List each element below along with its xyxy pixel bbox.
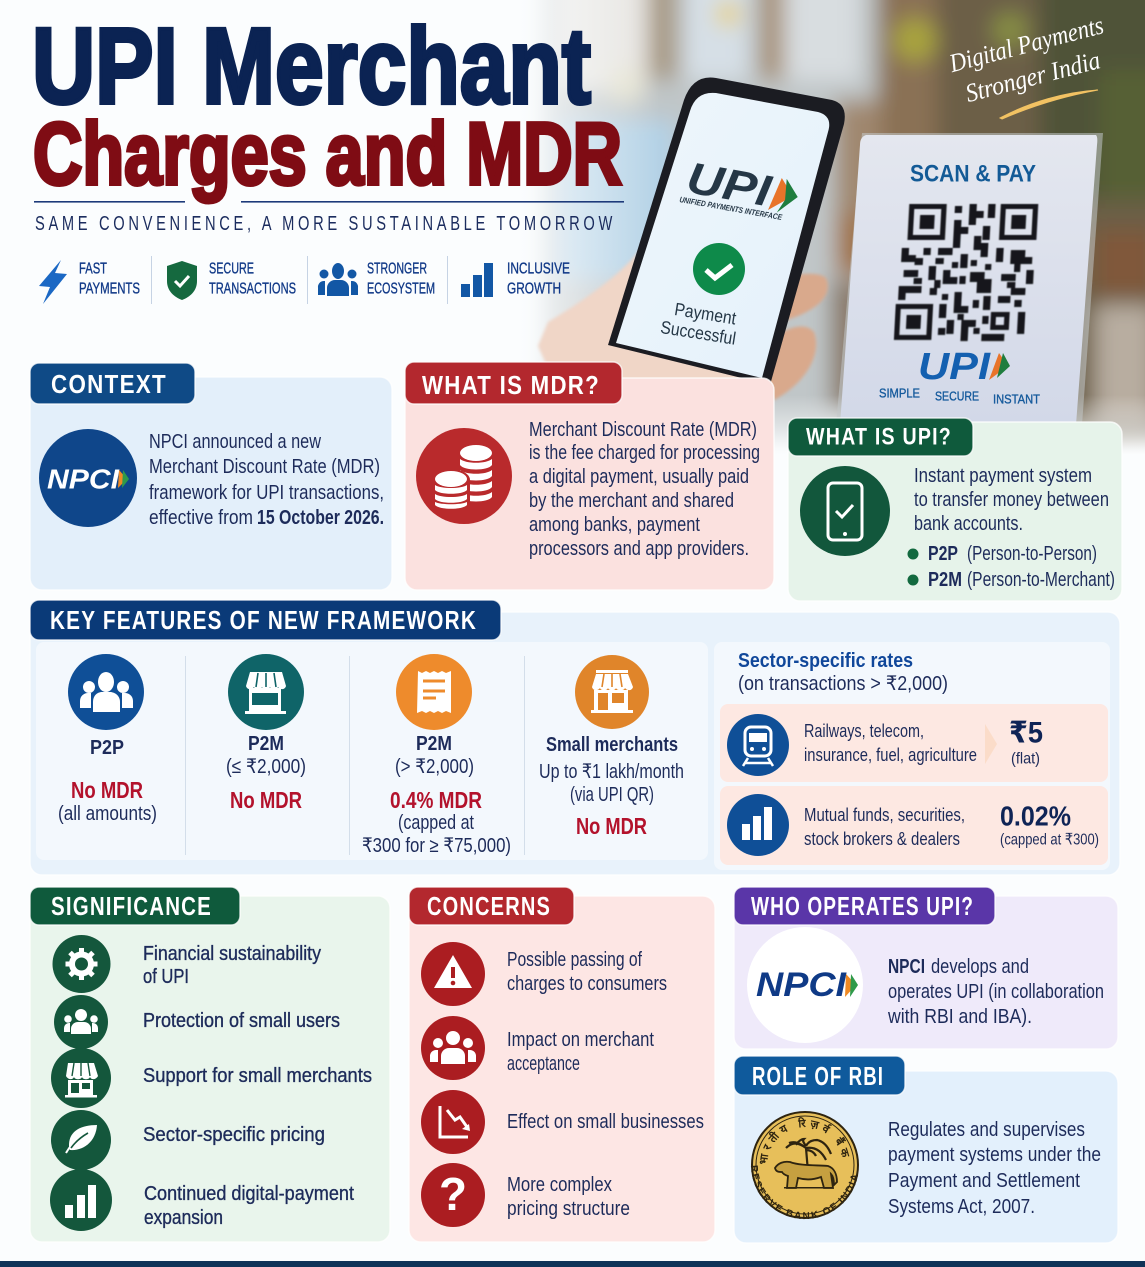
MDR text: is the fee charged for processing bbox=[529, 442, 760, 464]
item: support for small merchants bbox=[51, 1048, 372, 1108]
UPI text bbox=[914, 465, 1109, 535]
item: passing charges: charges to consumers bbox=[507, 973, 667, 995]
feature text: No MDR bbox=[230, 787, 302, 813]
context text bbox=[149, 431, 384, 529]
benefit: inclusive growth: INCLUSIVE bbox=[507, 260, 570, 278]
UPI text: bank accounts. bbox=[914, 513, 1023, 535]
bullet: P2P bbox=[908, 543, 1097, 565]
item: passing charges: Possible passing of bbox=[507, 949, 642, 971]
rate: 5 rupees: ₹5 bbox=[1009, 716, 1043, 750]
icon: bars bbox=[727, 794, 789, 856]
benefit: inclusive growth bbox=[507, 260, 570, 298]
item: pricing structure: pricing structure bbox=[507, 1198, 630, 1220]
UPI logo on card: UPI bbox=[918, 346, 992, 388]
handwritten slogan: Stronger India bbox=[962, 45, 1103, 108]
item: digital-payment expansion: expansion bbox=[144, 1207, 223, 1229]
sector-specific rates bbox=[714, 642, 1110, 870]
benefit: inclusive growth: GROWTH bbox=[507, 280, 561, 298]
card captions: SIMPLE bbox=[879, 386, 920, 400]
who operates text: with RBI and IBA). bbox=[887, 1006, 1032, 1028]
benefit: stronger ecosystem: STRONGER bbox=[367, 260, 427, 278]
rate: 5 rupees bbox=[1009, 716, 1043, 768]
hand holding phone bbox=[538, 250, 828, 400]
panel: what is UPI bbox=[788, 418, 1122, 601]
item: pricing structure bbox=[421, 1163, 630, 1227]
item: support for small merchants: Support for small merchants bbox=[143, 1065, 372, 1087]
icon: shield bbox=[167, 261, 197, 300]
item: merchant acceptance: acceptance bbox=[507, 1053, 580, 1075]
icon: NPCI logo: NPCI bbox=[47, 464, 120, 494]
hero photo background bbox=[0, 0, 1145, 495]
feature: P2M above 2000 bbox=[362, 654, 511, 857]
card captions: INSTANT bbox=[993, 392, 1040, 406]
feature text: (capped at bbox=[398, 812, 474, 834]
tagline: SAME CONVENIENCE, A MORE SUSTAINABLE TOMORROW bbox=[35, 213, 616, 235]
RBI text: Payment and Settlement bbox=[888, 1170, 1080, 1192]
payment successful text: Payment bbox=[673, 299, 738, 328]
sector heading: Sector-specific rates bbox=[738, 650, 913, 672]
item: financial sustainability: of UPI bbox=[143, 966, 189, 988]
icon: RBI seal: भारतीय रिज़र्व बैंक bbox=[760, 1117, 850, 1164]
benefit: secure transactions bbox=[209, 260, 296, 298]
icon: people bbox=[68, 654, 144, 730]
heading: significance: SIGNIFICANCE bbox=[51, 891, 212, 921]
feature text: P2P bbox=[90, 737, 124, 759]
payment successful text bbox=[659, 297, 741, 349]
row text bbox=[804, 721, 977, 765]
icon: people bbox=[318, 263, 358, 296]
benefit: fast payments bbox=[79, 260, 140, 298]
icon: NPCI logo bbox=[39, 429, 137, 527]
who operates text: operates UPI (in collaboration bbox=[888, 981, 1104, 1003]
row text: stock brokers & dealers bbox=[804, 829, 960, 849]
item: protection of small users bbox=[54, 995, 340, 1049]
item: sector-specific pricing bbox=[51, 1110, 325, 1170]
rate: 0.02 percent bbox=[1000, 800, 1099, 848]
icon: store bbox=[575, 655, 649, 729]
sector heading bbox=[738, 650, 948, 695]
item: sector-specific pricing: Sector-specific pricing bbox=[143, 1124, 325, 1146]
item: small businesses bbox=[421, 1090, 704, 1154]
sector row: percentage rate bbox=[720, 786, 1108, 865]
row text bbox=[804, 805, 965, 849]
panel: concerns bbox=[409, 887, 715, 1242]
icon: train bbox=[727, 714, 789, 776]
sector heading: (on transactions > ₹2,000) bbox=[738, 673, 948, 695]
heading: what is MDR bbox=[405, 362, 622, 404]
item: pricing structure: ? bbox=[439, 1168, 467, 1220]
feature: P2P bbox=[58, 654, 157, 825]
RBI text: payment systems under the bbox=[888, 1144, 1101, 1166]
heading: concerns bbox=[409, 887, 574, 925]
row text: Railways, telecom, bbox=[804, 721, 924, 741]
UPI logo on phone: UNIFIED PAYMENTS INTERFACE bbox=[679, 195, 783, 222]
item: merchant acceptance bbox=[421, 1016, 654, 1080]
context text: framework for UPI transactions, bbox=[149, 482, 384, 504]
item: passing charges bbox=[421, 942, 667, 1006]
icon: NPCI logo bbox=[747, 927, 863, 1043]
QR code bbox=[894, 204, 1038, 341]
panel: what is MDR bbox=[405, 362, 774, 590]
context text: Merchant Discount Rate (MDR) bbox=[149, 456, 380, 478]
rate: 0.02 percent: (capped at ₹300) bbox=[1000, 832, 1099, 848]
panel: who operates UPI bbox=[734, 887, 1118, 1049]
feature text: (≤ ₹2,000) bbox=[226, 756, 306, 778]
feature text: Small merchants bbox=[546, 734, 678, 756]
MDR text: processors and app providers. bbox=[529, 538, 749, 560]
heading: key features bbox=[30, 600, 501, 640]
item: small businesses: Effect on small businesses bbox=[507, 1111, 704, 1133]
item: pricing structure: More complex bbox=[507, 1174, 612, 1196]
benefit: fast payments: PAYMENTS bbox=[79, 280, 140, 298]
RBI text: Systems Act, 2007. bbox=[888, 1196, 1035, 1218]
heading: context bbox=[30, 363, 195, 404]
item: protection of small users: Protection of small users bbox=[143, 1010, 340, 1032]
row text: insurance, fuel, agriculture bbox=[804, 745, 977, 765]
icon: receipt bbox=[396, 654, 472, 730]
card captions bbox=[879, 386, 1040, 406]
feature text: (> ₹2,000) bbox=[395, 756, 474, 778]
title: UPI Merchant bbox=[32, 5, 591, 126]
heading: what is UPI bbox=[788, 418, 973, 456]
feature text: Up to ₹1 lakh/month bbox=[539, 761, 684, 783]
heading: who operates UPI bbox=[734, 887, 995, 925]
icon: NPCI logo: NPCI bbox=[756, 966, 848, 1004]
context text: 15 October 2026. bbox=[257, 507, 384, 529]
heading: who operates UPI: WHO OPERATES UPI? bbox=[751, 891, 974, 921]
UPI logo on phone bbox=[679, 153, 802, 224]
panel: key features bbox=[30, 600, 1120, 875]
feature text bbox=[226, 733, 306, 813]
context text: effective from bbox=[149, 507, 253, 529]
heading: what is MDR: WHAT IS MDR? bbox=[422, 370, 600, 400]
feature text: (all amounts) bbox=[58, 803, 157, 825]
feature text: P2M bbox=[248, 733, 284, 755]
heading: concerns: CONCERNS bbox=[427, 891, 551, 921]
who operates text: develops and bbox=[931, 956, 1029, 978]
UPI text: to transfer money between bbox=[914, 489, 1109, 511]
benefit: secure transactions: SECURE bbox=[209, 260, 254, 278]
MDR text: by the merchant and shared bbox=[529, 490, 734, 512]
title: Charges and MDR bbox=[33, 104, 622, 203]
bullet: P2P: (Person-to-Person) bbox=[967, 543, 1097, 565]
scan and pay card bbox=[836, 133, 1103, 425]
feature text: P2M bbox=[416, 733, 452, 755]
item: financial sustainability: Financial sustainability bbox=[143, 943, 321, 965]
icon: RBI seal: RESERVE BANK OF INDIA bbox=[750, 1166, 858, 1220]
item: digital-payment expansion: Continued digital-payment bbox=[144, 1183, 354, 1205]
feature text bbox=[362, 733, 511, 857]
benefit: stronger ecosystem bbox=[367, 260, 435, 298]
scan and pay card: SCAN & PAY bbox=[910, 160, 1036, 188]
success check bbox=[693, 243, 745, 295]
feature: small merchants bbox=[539, 655, 684, 839]
icon: lightning bolt bbox=[39, 260, 67, 304]
heading: significance bbox=[30, 887, 240, 925]
panel: role of RBI bbox=[734, 1056, 1118, 1242]
heading: role of RBI bbox=[734, 1056, 905, 1095]
MDR text: a digital payment, usually paid bbox=[529, 466, 749, 488]
item: digital-payment expansion bbox=[50, 1169, 354, 1231]
bullet: P2M bbox=[908, 569, 1115, 591]
heading: what is UPI: WHAT IS UPI? bbox=[806, 424, 952, 450]
title bbox=[32, 5, 622, 203]
feature text: 0.4% MDR bbox=[390, 787, 482, 813]
bullet: P2P: P2P bbox=[928, 543, 958, 565]
panel: significance bbox=[30, 887, 390, 1242]
icon: coins bbox=[416, 428, 512, 524]
icon: store bbox=[228, 654, 304, 730]
feature text: (via UPI QR) bbox=[570, 784, 654, 806]
icon: phone check bbox=[800, 466, 890, 556]
benefit: secure transactions: TRANSACTIONS bbox=[209, 280, 296, 298]
UPI logo on card bbox=[918, 346, 1010, 388]
RBI text: Regulates and supervises bbox=[888, 1119, 1085, 1141]
item: financial sustainability bbox=[52, 935, 321, 993]
rate: 5 rupees: (flat) bbox=[1011, 750, 1040, 768]
bullet: P2M: P2M bbox=[928, 569, 962, 591]
benefit: stronger ecosystem: ECOSYSTEM bbox=[367, 280, 435, 298]
heading: role of RBI: ROLE OF RBI bbox=[752, 1061, 884, 1091]
UPI text: Instant payment system bbox=[914, 465, 1092, 487]
handwritten slogan bbox=[946, 10, 1107, 119]
feature text bbox=[539, 734, 684, 839]
sector row: flat rate bbox=[720, 704, 1108, 782]
rate: 0.02 percent: 0.02% bbox=[1000, 800, 1071, 832]
phone bbox=[608, 77, 845, 385]
who operates text bbox=[887, 956, 1104, 1028]
panel: context bbox=[30, 363, 392, 590]
item: merchant acceptance: Impact on merchant bbox=[507, 1029, 654, 1051]
heading: key features: KEY FEATURES OF NEW FRAMEWORK bbox=[50, 605, 477, 635]
icon: growth bars bbox=[461, 263, 493, 297]
who operates text: NPCI bbox=[888, 956, 925, 978]
RBI text bbox=[888, 1119, 1101, 1218]
MDR text: among banks, payment bbox=[529, 514, 700, 536]
UPI logo on phone: UPI bbox=[683, 153, 775, 216]
payment successful text: Successful bbox=[659, 317, 737, 349]
feature text: ₹300 for ≥ ₹75,000) bbox=[362, 835, 511, 857]
feature text: No MDR bbox=[576, 813, 647, 839]
MDR text bbox=[529, 419, 760, 560]
context text: NPCI announced a new bbox=[149, 431, 321, 453]
handwritten slogan: Digital Payments bbox=[946, 10, 1107, 78]
footer bar bbox=[0, 1261, 1145, 1267]
benefit: fast payments: FAST bbox=[79, 260, 107, 278]
feature text bbox=[58, 737, 157, 825]
feature text: No MDR bbox=[71, 777, 143, 803]
heading: context: CONTEXT bbox=[51, 369, 167, 399]
MDR text: Merchant Discount Rate (MDR) bbox=[529, 419, 757, 441]
benefit strip bbox=[39, 256, 570, 304]
feature: P2M up to 2000 bbox=[226, 654, 306, 813]
icon: RBI seal bbox=[750, 1111, 859, 1220]
row text: Mutual funds, securities, bbox=[804, 805, 965, 825]
card captions: SECURE bbox=[935, 388, 979, 404]
